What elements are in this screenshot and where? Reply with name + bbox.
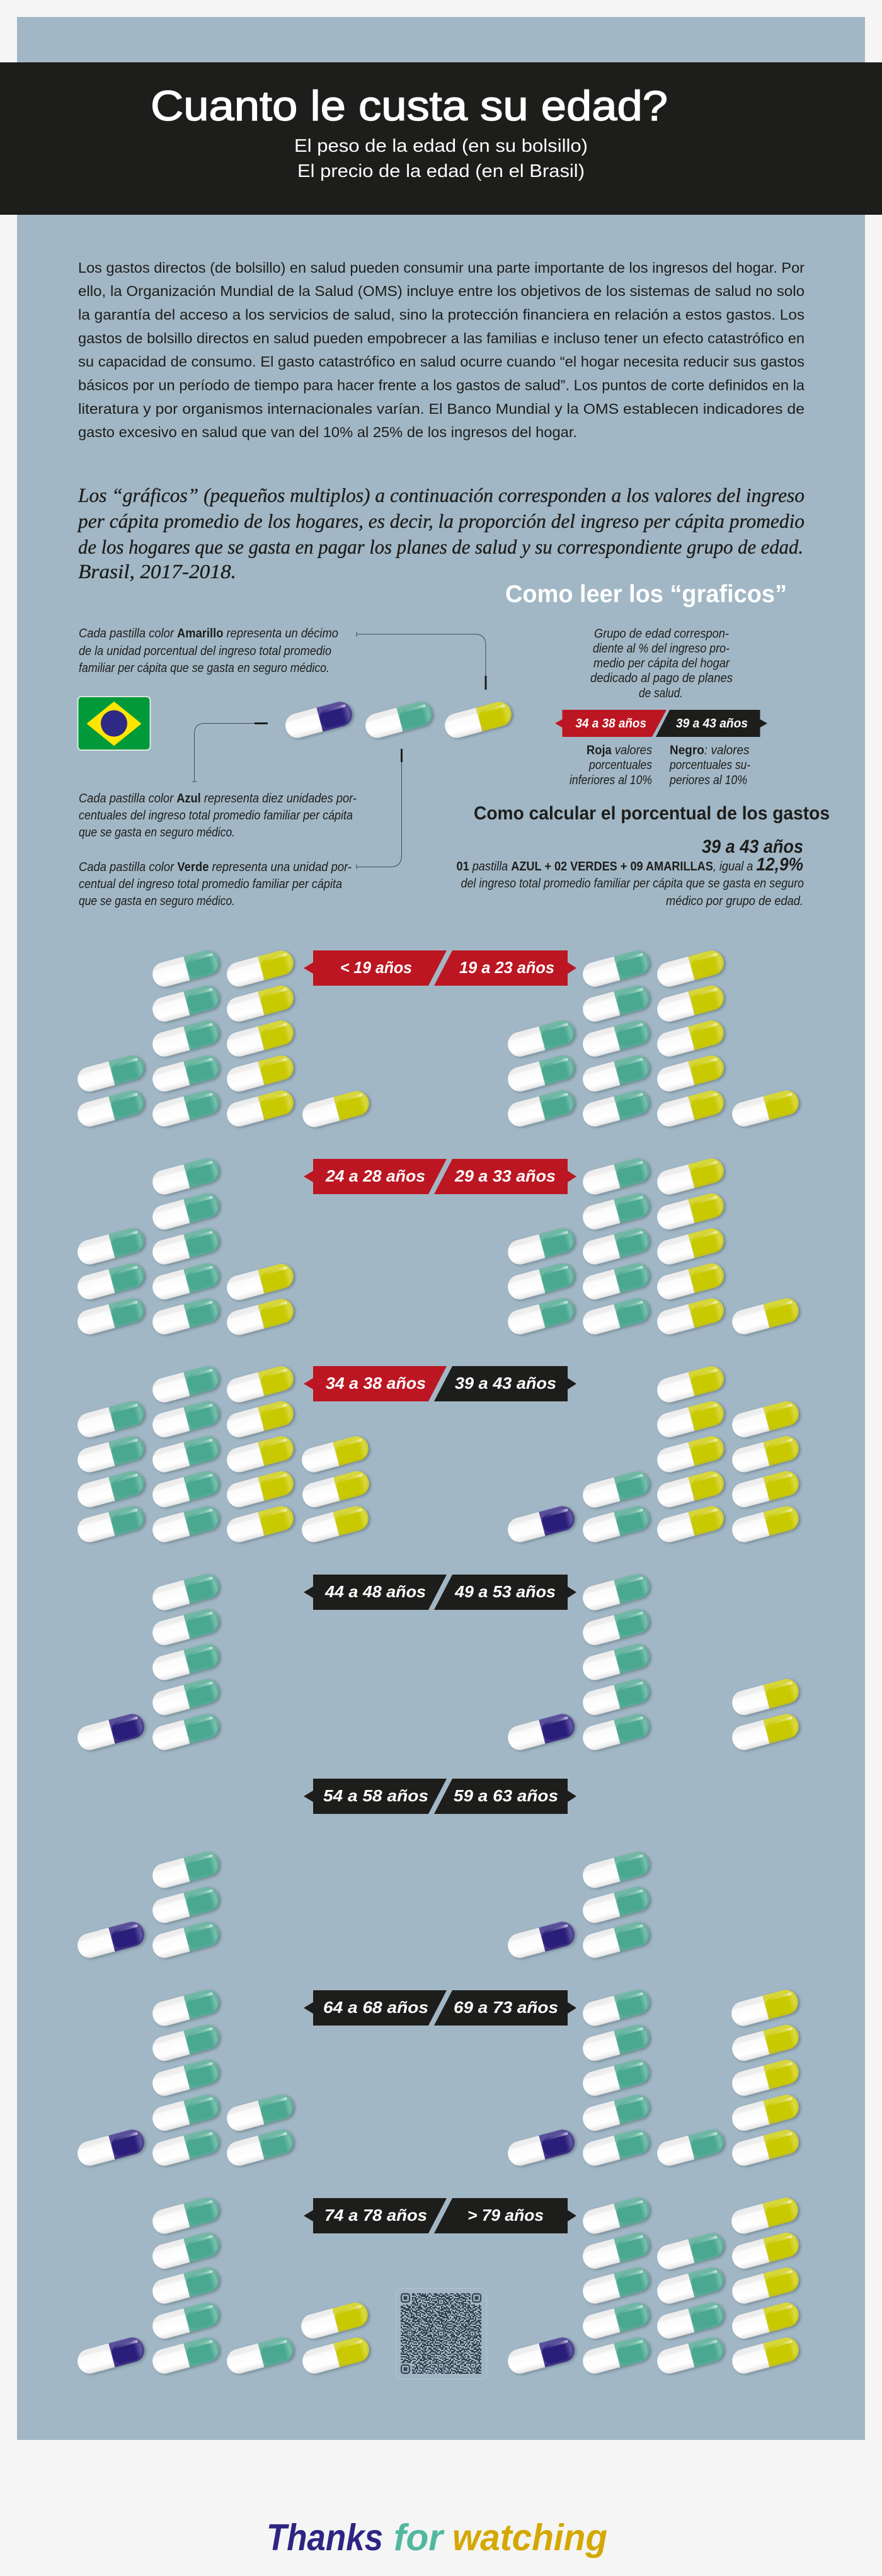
pills: 74 to 78 xyxy=(75,2194,374,2378)
age label: 69 a 73 años xyxy=(454,1998,558,2017)
subtitle: El precio de la edad (en el Brasil) xyxy=(297,161,585,181)
example age label xyxy=(555,710,767,737)
age label: 19 a 23 años xyxy=(459,958,554,977)
text: blue pill legend: centuales del ingreso total promedio familiar per cápita xyxy=(79,809,353,823)
pills: 64 to 68 xyxy=(75,1986,298,2170)
age label xyxy=(304,1990,576,2026)
example age label: 39 a 43 años xyxy=(676,717,748,731)
age label: 29 a 33 años xyxy=(454,1166,556,1185)
age label: 54 a 58 años xyxy=(323,1786,428,1805)
header band with title xyxy=(0,62,882,215)
italic explanatory paragraph: per cápita promedio de los hogares, es decir, la proporción del ingreso per cápita promedio xyxy=(77,510,805,532)
subtitle xyxy=(294,136,588,181)
intro paragraph: su capacidad de consumo. El gasto catastrófico en salud ocurre cuando “el hogar necesita reducir sus gastos xyxy=(78,353,805,370)
text: black meaning: Negro: valores xyxy=(670,743,750,757)
title: Cuanto le custa su edad? xyxy=(151,83,668,130)
text: yellow pill legend xyxy=(79,627,338,675)
text: age group explanation: de salud. xyxy=(639,687,683,700)
text: black meaning xyxy=(669,743,750,787)
connector: blue pill to text xyxy=(192,723,268,782)
intro paragraph: la garantía del acceso a los servicios de salud, sino la protección financiera en relación a estos gastos. Los xyxy=(78,306,805,322)
italic explanatory paragraph xyxy=(77,484,805,583)
age label: 24 a 28 años xyxy=(325,1166,425,1185)
italic explanatory paragraph: Los “gráficos” (pequeños multiplos) a continuación corresponden a los valores del ingreso xyxy=(77,484,805,506)
heading: como leer los graficos: Como leer los “graficos” xyxy=(505,581,787,608)
text: red meaning: porcentuales xyxy=(588,758,652,772)
text: age group explanation: medio per cápita del hogar xyxy=(593,656,730,670)
intro paragraph: básicos por un período de tiempo para hacer frente a los gastos de salud”. Los puntos de corte definidos en la xyxy=(78,377,805,393)
calculation example: del ingreso total promedio familiar per cápita que se gasta en seguro xyxy=(461,877,804,891)
age label: > 79 años xyxy=(467,2206,544,2225)
pills: 39 to 43 xyxy=(505,1363,803,1546)
pills: 34 to 38 xyxy=(75,1363,374,1546)
intro paragraph xyxy=(78,259,805,440)
panel: 64 to 68 and 69 to 73 xyxy=(75,1986,803,2170)
age label: 64 a 68 años xyxy=(323,1998,428,2017)
text: yellow pill legend: de la unidad porcentual del ingreso total promedio xyxy=(79,644,331,658)
text: blue pill legend: Cada pastilla color Azul representa diez unidades por- xyxy=(79,792,357,806)
pills: 29 to 33 xyxy=(505,1155,803,1338)
text: age group explanation xyxy=(590,627,733,700)
connector: yellow pill to text xyxy=(357,632,486,690)
text: green pill legend: que se gasta en seguro médico. xyxy=(79,894,235,908)
age label xyxy=(304,1575,576,1610)
pills: 69 to 73 xyxy=(505,1986,803,2170)
age label xyxy=(304,2198,576,2233)
intro paragraph: gastos de bolsillo directos en salud pueden empobrecer a las familias e incluso tener un efecto catastrófico en xyxy=(78,330,805,346)
age label xyxy=(304,950,576,986)
age label: 39 a 43 años xyxy=(455,1374,556,1393)
panel: 74 to 78 and over 79 xyxy=(75,2194,803,2378)
age label: 59 a 63 años xyxy=(454,1786,558,1805)
pills: over 79 xyxy=(505,2194,803,2378)
age label: 34 a 38 años xyxy=(326,1374,426,1393)
panel: 34 to 38 and 39 to 43 xyxy=(75,1363,803,1546)
text: age group explanation: Grupo de edad correspon- xyxy=(594,627,729,641)
closing message: for xyxy=(394,2517,445,2558)
italic explanatory paragraph: de los hogares que se gasta en pagar los planes de salud y su correspondiente grupo de edad. xyxy=(78,535,803,558)
text: green pill legend xyxy=(79,860,352,908)
closing message: watching xyxy=(452,2517,607,2558)
text: red meaning xyxy=(570,743,652,787)
pills: 24 to 28 xyxy=(75,1155,298,1339)
italic explanatory paragraph: Brasil, 2017-2018. xyxy=(78,560,236,583)
icon: brazil flag xyxy=(78,697,150,750)
age label xyxy=(304,1779,576,1814)
text: black meaning: periores al 10% xyxy=(669,773,747,787)
pills: 59 to 63 xyxy=(505,1849,654,1962)
intro paragraph: gasto excesivo en salud que van del 10% al 25% de los ingresos del hogar. xyxy=(78,424,577,440)
panel: under 19 and 19 to 23 xyxy=(75,947,803,1131)
text: green pill legend: Cada pastilla color Verde representa una unidad por- xyxy=(79,860,352,874)
calculation example: 01 pastilla AZUL + 02 VERDES + 09 AMARILLAS, igual a 12,9% xyxy=(456,855,803,875)
text: blue pill legend: que se gasta en seguro médico. xyxy=(79,826,235,840)
text: age group explanation: dedicado al pago de planes xyxy=(590,671,733,685)
age label xyxy=(304,1159,576,1194)
text: blue pill legend xyxy=(79,792,357,840)
intro paragraph: ello, la Organización Mundial de la Salud (OMS) incluye entre los objetivos de los sistemas de salud no solo xyxy=(78,283,805,299)
intro paragraph: literatura y por organismos internacionales varían. El Banco Mundial y la OMS establecen indicadores de xyxy=(78,401,805,417)
text: yellow pill legend: familiar per cápita que se gasta en seguro médico. xyxy=(79,661,329,675)
panel: 24 to 28 and 29 to 33 xyxy=(75,1155,803,1339)
age label: < 19 años xyxy=(340,958,412,977)
age label: 74 a 78 años xyxy=(324,2206,427,2225)
text: yellow pill legend: Cada pastilla color Amarillo representa un décimo xyxy=(79,627,338,641)
pills: under 19 xyxy=(75,947,374,1131)
text: red meaning: Roja valores xyxy=(587,743,652,757)
icon: yellow pill xyxy=(442,698,516,742)
panel: 54 to 58 and 59 to 63 xyxy=(75,1779,654,1962)
example age label: 34 a 38 años xyxy=(576,717,646,731)
qr code xyxy=(396,2289,486,2379)
calculation example: 39 a 43 años xyxy=(702,836,803,857)
text: green pill legend: centual del ingreso total promedio familiar per cápita xyxy=(79,877,342,891)
pills: 49 to 53 xyxy=(505,1571,803,1754)
text: black meaning: porcentuales su- xyxy=(669,758,750,772)
pills: 44 to 48 xyxy=(75,1571,224,1754)
icon: blue pill xyxy=(283,698,357,742)
calculation example xyxy=(456,836,804,908)
closing message xyxy=(266,2517,607,2558)
heading: como calcular: Como calcular el porcentual de los gastos xyxy=(474,803,830,824)
text: red meaning: inferiores al 10% xyxy=(570,773,652,787)
text: age group explanation: diente al % del ingreso pro- xyxy=(593,642,730,656)
panel: 44 to 48 and 49 to 53 xyxy=(75,1571,803,1754)
pills: 19 to 23 xyxy=(505,947,803,1131)
legend pills xyxy=(283,698,516,742)
icon: green pill xyxy=(363,698,437,742)
age label: 44 a 48 años xyxy=(324,1582,426,1601)
subtitle: El peso de la edad (en su bolsillo) xyxy=(294,136,588,156)
connector: green pill to text xyxy=(357,749,402,869)
intro paragraph: Los gastos directos (de bolsillo) en salud pueden consumir una parte importante de los ingresos del hogar. Por xyxy=(78,259,805,276)
pills: 54 to 58 xyxy=(75,1849,224,1962)
calculation example: médico por grupo de edad. xyxy=(666,894,803,908)
age label xyxy=(304,1366,576,1401)
age label: 49 a 53 años xyxy=(454,1582,556,1601)
closing message: Thanks xyxy=(266,2517,383,2558)
